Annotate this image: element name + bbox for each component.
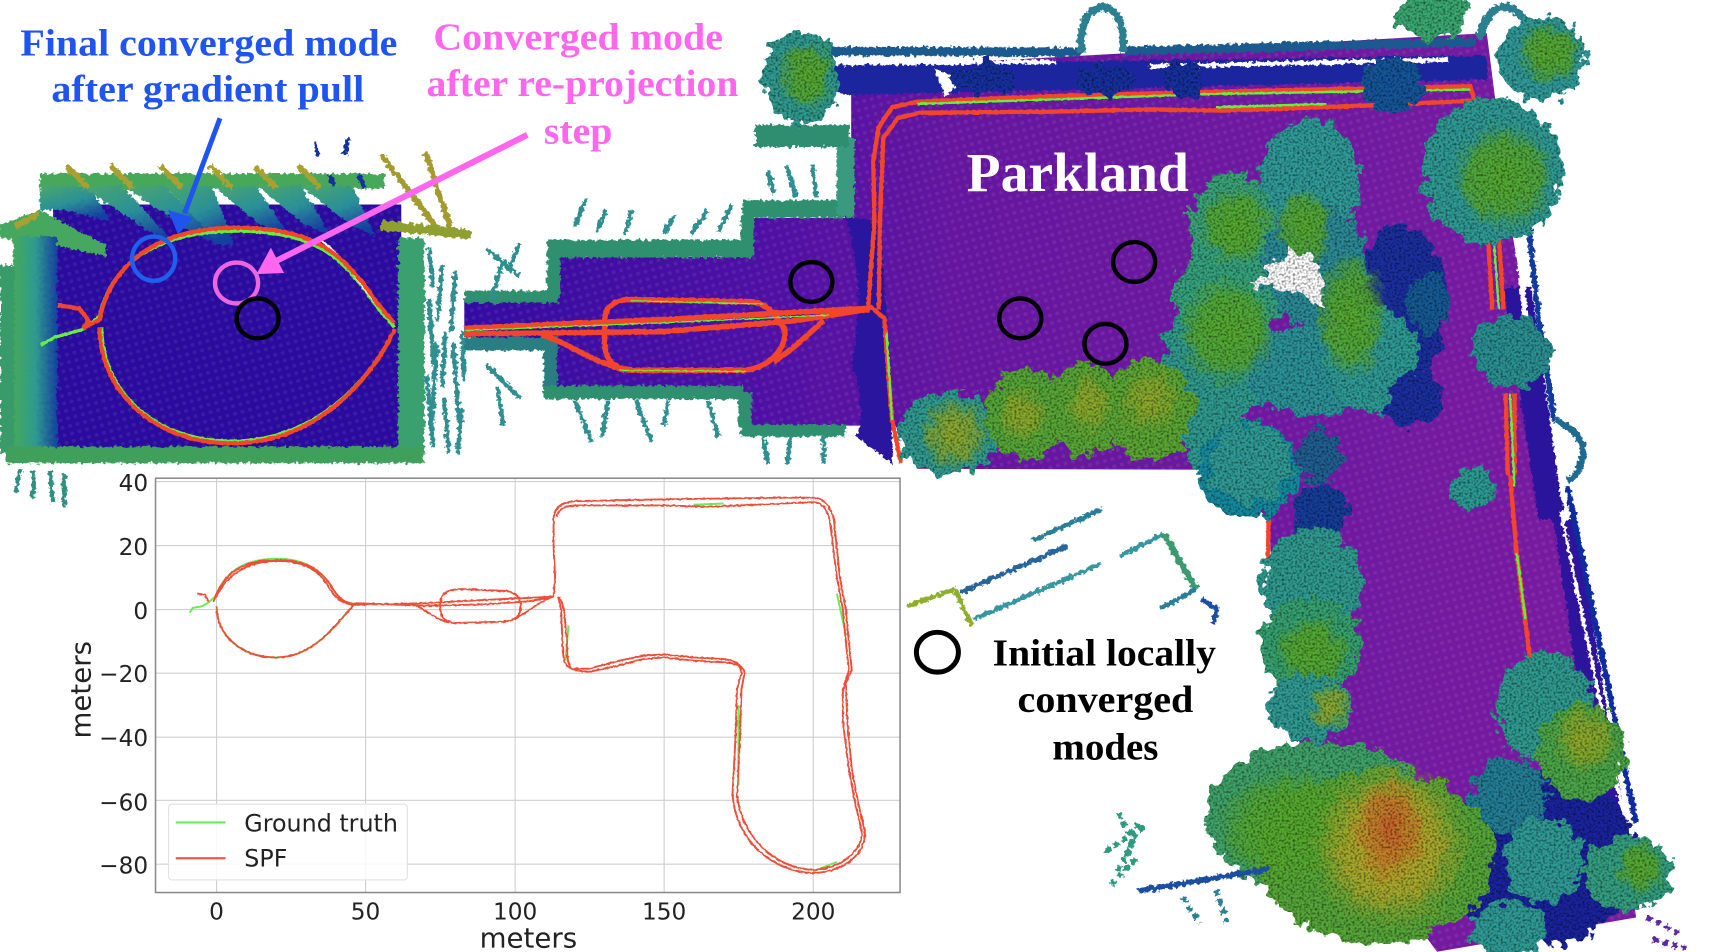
tree: top edge [1394, 0, 1469, 38]
SPF corridor lines [464, 300, 867, 370]
top fence with arches [774, 7, 1527, 66]
mode circle: re-projection (pink) [215, 263, 258, 303]
trajectory on map: corridor [464, 300, 867, 371]
legend text line 3: modes [1052, 727, 1158, 768]
ground truth overlay: left loop [41, 231, 395, 441]
tree: small dark [1299, 429, 1343, 482]
legend: Ground truth [244, 809, 398, 837]
tree: bottom [1471, 902, 1546, 952]
x-axis tick labels [209, 899, 835, 926]
title: Parkland: Parkland [967, 142, 1189, 203]
tree: teal lower right [1583, 836, 1671, 911]
dark boundary bands [774, 55, 1625, 818]
tree: right group [1497, 652, 1625, 800]
trajectory on map: left loop [41, 228, 395, 443]
tree: giant [1205, 741, 1496, 943]
dark understorey bottom right [1448, 768, 1636, 945]
tree: column [1259, 527, 1363, 741]
tree: top left [763, 31, 838, 124]
initial modes: black circles [237, 242, 1155, 364]
map floor: left room [53, 205, 401, 450]
series: SPF [197, 498, 865, 873]
white lidar gap on upper-right loop [321, 240, 392, 321]
x-axis tick labels: 200 [791, 899, 835, 926]
small structure fragments near legend [908, 510, 1217, 626]
tree: small teal on floor [1450, 466, 1495, 511]
x-axis tick labels: 100 [493, 899, 537, 926]
y-axis tick labels: 20 [119, 534, 148, 561]
chart frame [156, 478, 900, 893]
y-axis tick labels: 0 [133, 598, 148, 625]
tree canopies [763, 0, 1671, 952]
y-axis tick labels: −20 [99, 661, 148, 688]
y-axis tick labels: 40 [119, 470, 148, 497]
right fence [1517, 227, 1636, 824]
left room walls [0, 153, 471, 463]
ground truth parkland route [887, 90, 1525, 619]
trajectory chart [65, 470, 900, 952]
tree: blue teal lower [1471, 758, 1546, 833]
arrow: blue to final mode [168, 118, 220, 234]
mode circle: final converged (blue) [132, 237, 175, 281]
map floor: corridor and parkland [464, 33, 1636, 952]
heading: after gradient pull: after gradient pull [51, 70, 364, 111]
tree: teal lower middle [1503, 818, 1583, 902]
heading: converged mode: Converged mode [433, 18, 723, 59]
y-axis tick labels [99, 470, 148, 879]
series: ground truth [190, 503, 846, 872]
legend: SPF [244, 845, 287, 873]
tree row: lower left [898, 360, 1300, 518]
panel: inset chart background [0, 469, 906, 952]
trajectory on map: parkland route [868, 86, 1530, 658]
tree cluster: centre [1164, 119, 1450, 427]
legend icon: black circle [916, 632, 958, 672]
scattered returns beside corridor [315, 138, 824, 464]
legend [169, 804, 407, 880]
heading: final converged mode: Final converged mode [20, 23, 397, 64]
tree: upper right [1422, 98, 1563, 244]
x-axis tick labels: 150 [642, 899, 686, 926]
clearing inside cluster [1249, 249, 1324, 310]
scattered returns lower right [1105, 812, 1686, 948]
tree: dark round lower [1293, 484, 1351, 539]
tree: top right [1497, 15, 1585, 99]
SPF overlay: left loop [57, 228, 395, 443]
chart gridlines [156, 479, 900, 892]
arrow: pink to re-projection mode [256, 135, 527, 274]
tree: small floor teal [1472, 315, 1552, 388]
y-axis tick labels: −60 [99, 789, 148, 816]
SPF parkland route [868, 86, 1530, 658]
scatter: bottom-left of map [15, 470, 64, 506]
legend text line 2: converged [1018, 680, 1193, 721]
fence bumps: dark shrubs under top fence [951, 57, 1424, 115]
x-axis tick labels: 0 [209, 899, 224, 926]
legend text line 1: Initial locally [993, 633, 1216, 674]
y-axis tick labels: −40 [99, 725, 148, 752]
y-axis tick labels: −80 [99, 852, 148, 879]
heading: step: step [544, 112, 612, 153]
corridor walls [464, 125, 854, 437]
ground truth corridor highlight [464, 301, 829, 371]
x-axis tick labels: 50 [351, 899, 380, 926]
legend: initial modes [916, 632, 1216, 768]
heading: after re-projection: after re-projection [427, 64, 739, 105]
y-axis label: meters [65, 641, 98, 739]
